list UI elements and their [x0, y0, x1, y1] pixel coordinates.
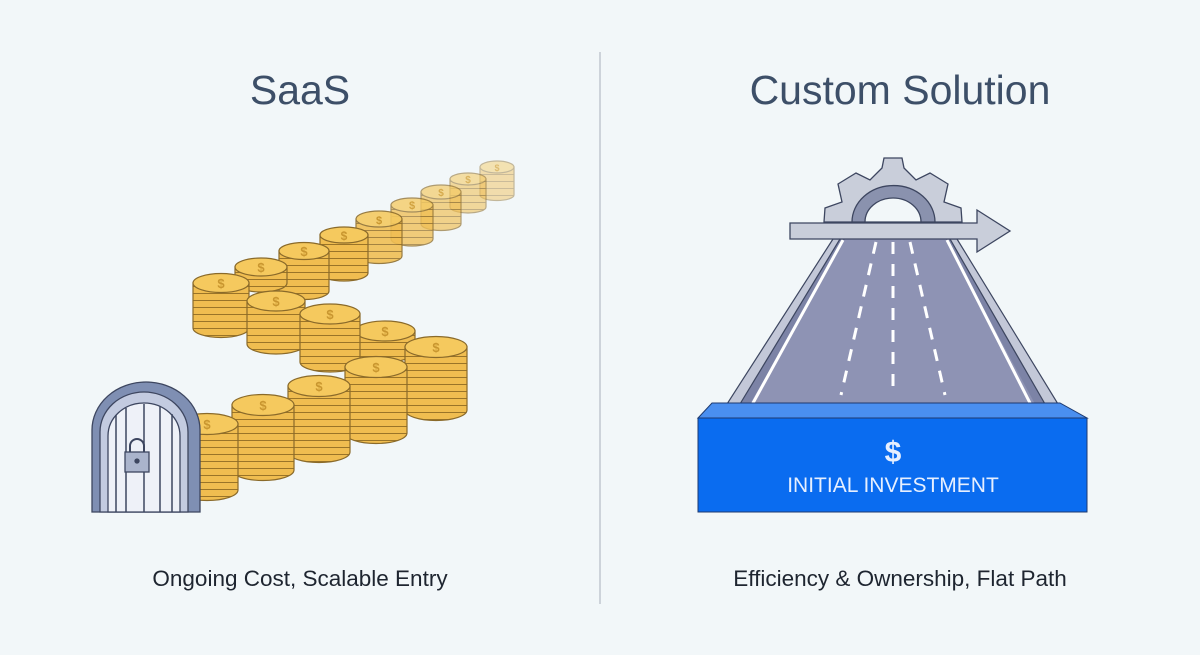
- title: SaaS: SaaS: [250, 67, 350, 113]
- dollar marks on coins: $: [494, 163, 500, 173]
- arrow: [790, 210, 1010, 252]
- illustration: road with gear and investment base: [696, 157, 1089, 512]
- dollar marks on coins: $: [381, 324, 389, 339]
- dollar marks on coins: $: [203, 417, 211, 432]
- dollar marks on coins: $: [372, 360, 380, 375]
- dollar marks on coins: $: [438, 188, 444, 199]
- dollar marks on coins: [203, 163, 500, 432]
- dollar marks on coins: $: [376, 215, 382, 227]
- caption: Custom Solution: Efficiency & Ownership, Flat Path: [733, 566, 1067, 591]
- dollar marks on coins: $: [315, 379, 323, 394]
- dollar marks on coins: $: [409, 200, 415, 212]
- base: initial investment: INITIAL INVESTMENT: [787, 474, 999, 497]
- base: initial investment: $: [885, 436, 902, 469]
- icon: padlock: [125, 439, 149, 472]
- icon: locked door arch: [92, 382, 200, 512]
- base: initial investment: [698, 403, 1087, 512]
- road: [727, 239, 1058, 404]
- dollar marks on coins: $: [341, 229, 348, 243]
- icon: gear: [824, 158, 962, 222]
- dollar marks on coins: $: [259, 398, 267, 413]
- dollar marks on coins: $: [272, 294, 280, 309]
- divider: [599, 52, 601, 604]
- dollar marks on coins: $: [300, 244, 308, 259]
- dollar marks on coins: $: [432, 340, 440, 355]
- dollar marks on coins: $: [465, 175, 471, 186]
- dollar marks on coins: $: [326, 307, 334, 322]
- coin stacks: [176, 161, 514, 500]
- title: Custom Solution: Custom Solution: [750, 67, 1050, 113]
- caption: SaaS: Ongoing Cost, Scalable Entry: [152, 566, 448, 591]
- dollar marks on coins: $: [257, 260, 265, 275]
- illustration: SaaS coins and door: [91, 160, 515, 513]
- dollar marks on coins: $: [217, 276, 225, 291]
